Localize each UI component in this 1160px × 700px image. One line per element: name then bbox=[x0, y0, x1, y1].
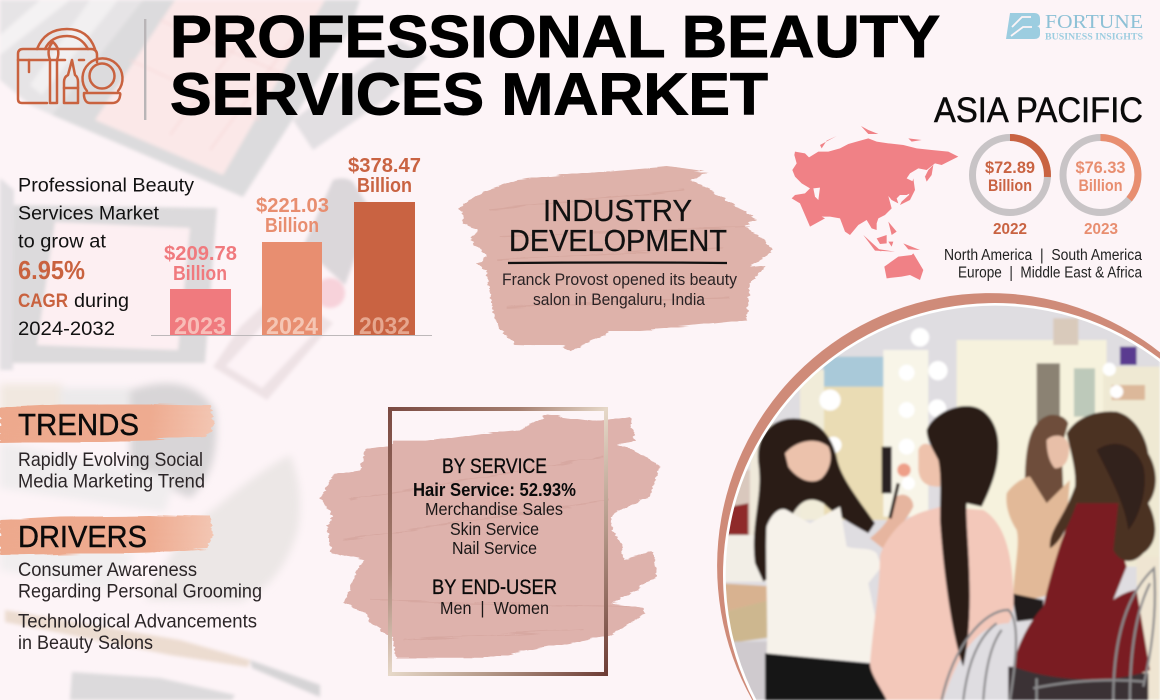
map: Asia Pacific bbox=[792, 126, 958, 280]
panel: trends bbox=[0, 404, 214, 492]
by end-user: BY END-USER bbox=[432, 576, 557, 599]
paint swatch bbox=[460, 166, 773, 352]
mirror lights bbox=[819, 328, 1123, 490]
bar 2032 bbox=[348, 155, 421, 340]
donut: 2023: Billion bbox=[1078, 176, 1122, 195]
bar 2023: 2023 bbox=[174, 313, 226, 340]
other regions: North America | South America bbox=[944, 247, 1142, 264]
panel: segmentation bbox=[320, 409, 660, 674]
title bbox=[170, 4, 940, 128]
gradient frame bbox=[390, 409, 606, 674]
brush band bbox=[0, 516, 214, 556]
donut: 2023: 2023 bbox=[1084, 221, 1118, 238]
bar 2032: 2032 bbox=[359, 313, 410, 340]
trend text bbox=[18, 449, 205, 492]
growth text block: Professional Beauty bbox=[18, 174, 194, 196]
growth text block: to grow at bbox=[18, 230, 107, 252]
by service: Skin Service bbox=[450, 519, 539, 539]
by service bbox=[413, 455, 576, 558]
growth text block bbox=[18, 174, 194, 340]
donut: 2022: $72.89 bbox=[985, 158, 1035, 177]
description bbox=[502, 270, 737, 309]
brush band bbox=[0, 404, 214, 443]
growth text block: 6.95% bbox=[18, 255, 85, 285]
panel: trends: TRENDS bbox=[18, 407, 139, 442]
panel: drivers bbox=[0, 516, 262, 654]
by service: Hair Service: 52.93% bbox=[413, 480, 576, 500]
title: SERVICES MARKET bbox=[170, 62, 768, 128]
driver text: Consumer Awareness bbox=[18, 559, 197, 581]
description: Franck Provost opened its beauty bbox=[502, 270, 737, 289]
bar 2023: $209.78 bbox=[164, 243, 237, 265]
by end-user bbox=[432, 576, 557, 618]
growth text block: 2024-2032 bbox=[18, 318, 115, 340]
donut: 2022: Billion bbox=[988, 176, 1032, 195]
heading bbox=[509, 193, 727, 258]
bar 2023: Billion bbox=[173, 263, 227, 285]
bar 2024: 2024 bbox=[266, 313, 319, 340]
chairs bbox=[942, 568, 1155, 700]
driver text: in Beauty Salons bbox=[18, 632, 153, 654]
donut: 2022: 2022 bbox=[993, 221, 1027, 238]
panel: industry development bbox=[460, 166, 773, 352]
mirror and walls bbox=[822, 386, 890, 521]
donut: 2022 bbox=[972, 138, 1048, 238]
bar 2024 bbox=[256, 195, 329, 340]
bar 2023 bbox=[164, 243, 237, 340]
logo: Fortune Business Insights: FORTUNE bbox=[1045, 11, 1143, 33]
heading: Asia Pacific: ASIA PACIFIC bbox=[934, 91, 1143, 130]
divider bbox=[144, 19, 146, 120]
trend text: Rapidly Evolving Social bbox=[18, 449, 203, 471]
growth text block: during bbox=[74, 290, 129, 312]
logo: Fortune Business Insights: BUSINESS INSIGHTS bbox=[1045, 32, 1143, 42]
growth text block: CAGR bbox=[18, 290, 68, 312]
person: client in pink fur bbox=[870, 406, 1014, 700]
by service: Nail Service bbox=[452, 538, 537, 558]
trend text: Media Marketing Trend bbox=[18, 470, 205, 492]
donut: 2023 bbox=[1063, 138, 1138, 238]
floor and legs bbox=[1008, 667, 1148, 700]
driver text bbox=[18, 559, 262, 654]
icon: beauty kit bbox=[18, 29, 122, 103]
logo: Fortune Business Insights bbox=[1006, 11, 1143, 42]
bar 2024: $221.03 bbox=[256, 195, 329, 217]
person: back makeup artist bbox=[1006, 415, 1070, 622]
heading: INDUSTRY bbox=[543, 193, 692, 228]
driver text: Regarding Personal Grooming bbox=[18, 580, 262, 602]
panel: drivers: DRIVERS bbox=[18, 519, 147, 554]
bar 2024: Billion bbox=[265, 215, 319, 237]
by service: Merchandise Sales bbox=[425, 499, 563, 519]
person: client in red dress bbox=[1013, 411, 1156, 680]
by end-user: Men | Women bbox=[440, 598, 549, 618]
bar chart: market size bbox=[151, 155, 432, 340]
other regions bbox=[944, 247, 1142, 282]
bar 2032: Billion bbox=[357, 175, 412, 197]
description: salon in Bengaluru, India bbox=[533, 290, 705, 309]
heading: DEVELOPMENT bbox=[509, 223, 727, 258]
growth text block: Services Market bbox=[18, 202, 160, 224]
title: PROFESSIONAL BEAUTY bbox=[170, 4, 940, 70]
donut: 2023: $76.33 bbox=[1076, 158, 1126, 177]
photo: makeup artists in salon bbox=[700, 290, 1160, 700]
driver text: Technological Advancements bbox=[18, 610, 257, 632]
paint swatch bbox=[320, 415, 660, 658]
by service: BY SERVICE bbox=[442, 455, 547, 478]
person: makeup artist bbox=[754, 418, 913, 700]
bar 2032: $378.47 bbox=[348, 155, 421, 177]
